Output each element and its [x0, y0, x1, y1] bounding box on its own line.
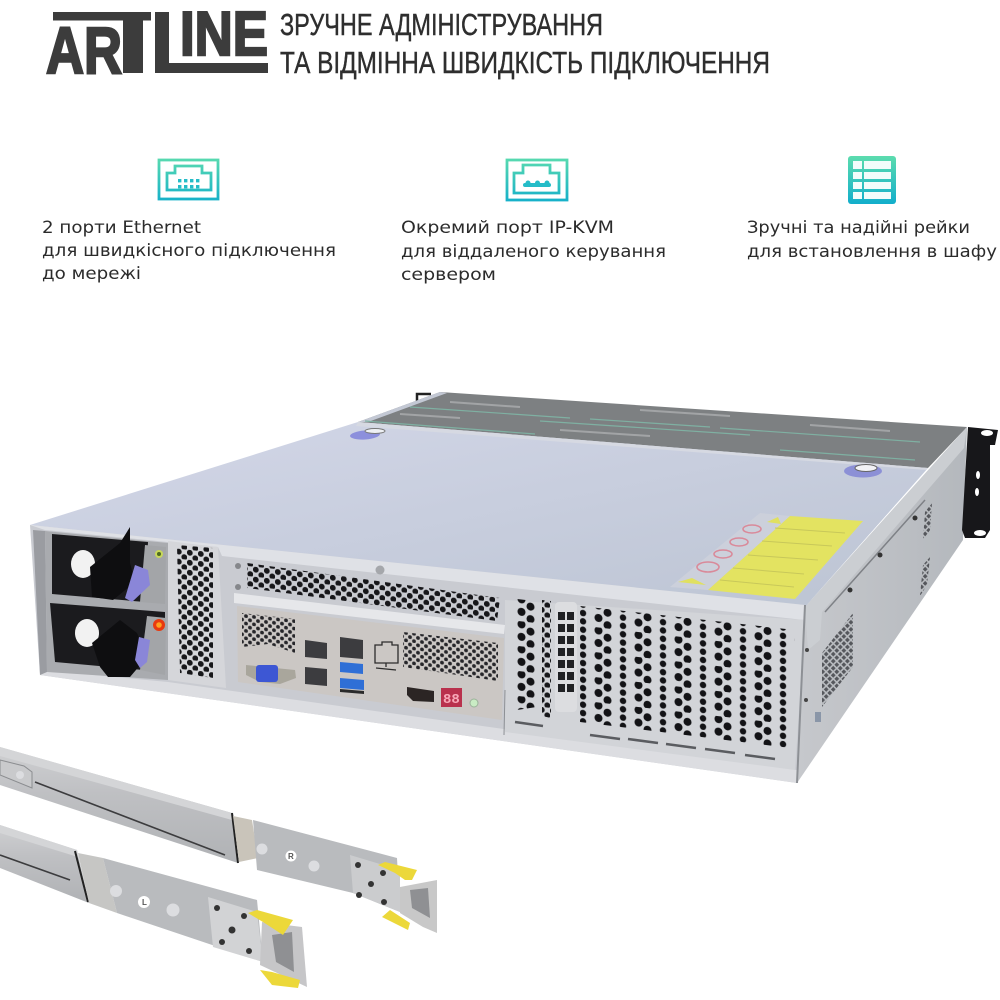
- bottom lip: [40, 670, 797, 783]
- text: Ethernet ports: для швидкісного підключення: [42, 241, 336, 261]
- text: IP-KVM port: сервером: [401, 265, 496, 285]
- heading: ЗРУЧНЕ АДМІНІСТРУВАННЯ: [280, 7, 603, 42]
- right rail: [0, 747, 437, 933]
- I/O plate: [237, 606, 504, 720]
- rear panel: [30, 525, 805, 783]
- top vent: [247, 563, 500, 621]
- icon: IP-KVM port: [507, 160, 567, 200]
- rear-left bracket: [417, 394, 431, 406]
- logo: ARTLINE: INE: [180, 0, 268, 69]
- warning label: [670, 513, 863, 599]
- text: rack rails: Зручні та надійні рейки: [747, 218, 970, 238]
- top dark section: [356, 392, 967, 470]
- right rail: R: [288, 852, 294, 861]
- heading: [280, 7, 770, 80]
- status display: 88: [443, 692, 460, 708]
- logo: ARTLINE: [46, 0, 268, 87]
- blue latch left: [350, 428, 385, 441]
- server top cover: [30, 422, 928, 607]
- left rail: [0, 825, 307, 988]
- blue latch right: [844, 464, 882, 478]
- status display: [441, 688, 462, 708]
- icon: rack rails: [848, 156, 896, 204]
- text: rack rails: для встановлення в шафу: [747, 242, 997, 262]
- expansion slots: [505, 599, 805, 770]
- vertical vent: [168, 541, 226, 688]
- text: IP-KVM port: Окремий порт IP-KVM: [401, 218, 614, 238]
- upper plate strip: [234, 593, 505, 634]
- power supplies: [33, 527, 168, 680]
- side panel: [797, 427, 967, 783]
- text: IP-KVM port: для віддаленого керування: [401, 242, 666, 262]
- rack ear bracket: [962, 427, 998, 538]
- HDMI port: [407, 687, 434, 702]
- icon: Ethernet port: [159, 160, 218, 199]
- network mark: [375, 642, 398, 670]
- left rail: L: [142, 898, 147, 907]
- LED: [470, 699, 478, 707]
- text: Ethernet ports: 2 порти Ethernet: [42, 218, 201, 238]
- VGA port: [246, 665, 296, 684]
- server: [30, 392, 998, 783]
- RJ45 ports: [305, 637, 363, 686]
- text: Ethernet ports: до мережі: [42, 264, 141, 284]
- front corner edge: [797, 605, 805, 783]
- USB ports: [340, 662, 364, 690]
- heading: ТА ВІДМІННА ШВИДКІСТЬ ПІДКЛЮЧЕННЯ: [280, 45, 770, 80]
- text: IP-KVM port: [401, 218, 666, 285]
- top lip: [30, 525, 805, 620]
- text: rack rails: [747, 218, 997, 262]
- logo: ARTLINE: AR: [46, 13, 122, 87]
- text: Ethernet ports: [42, 218, 336, 284]
